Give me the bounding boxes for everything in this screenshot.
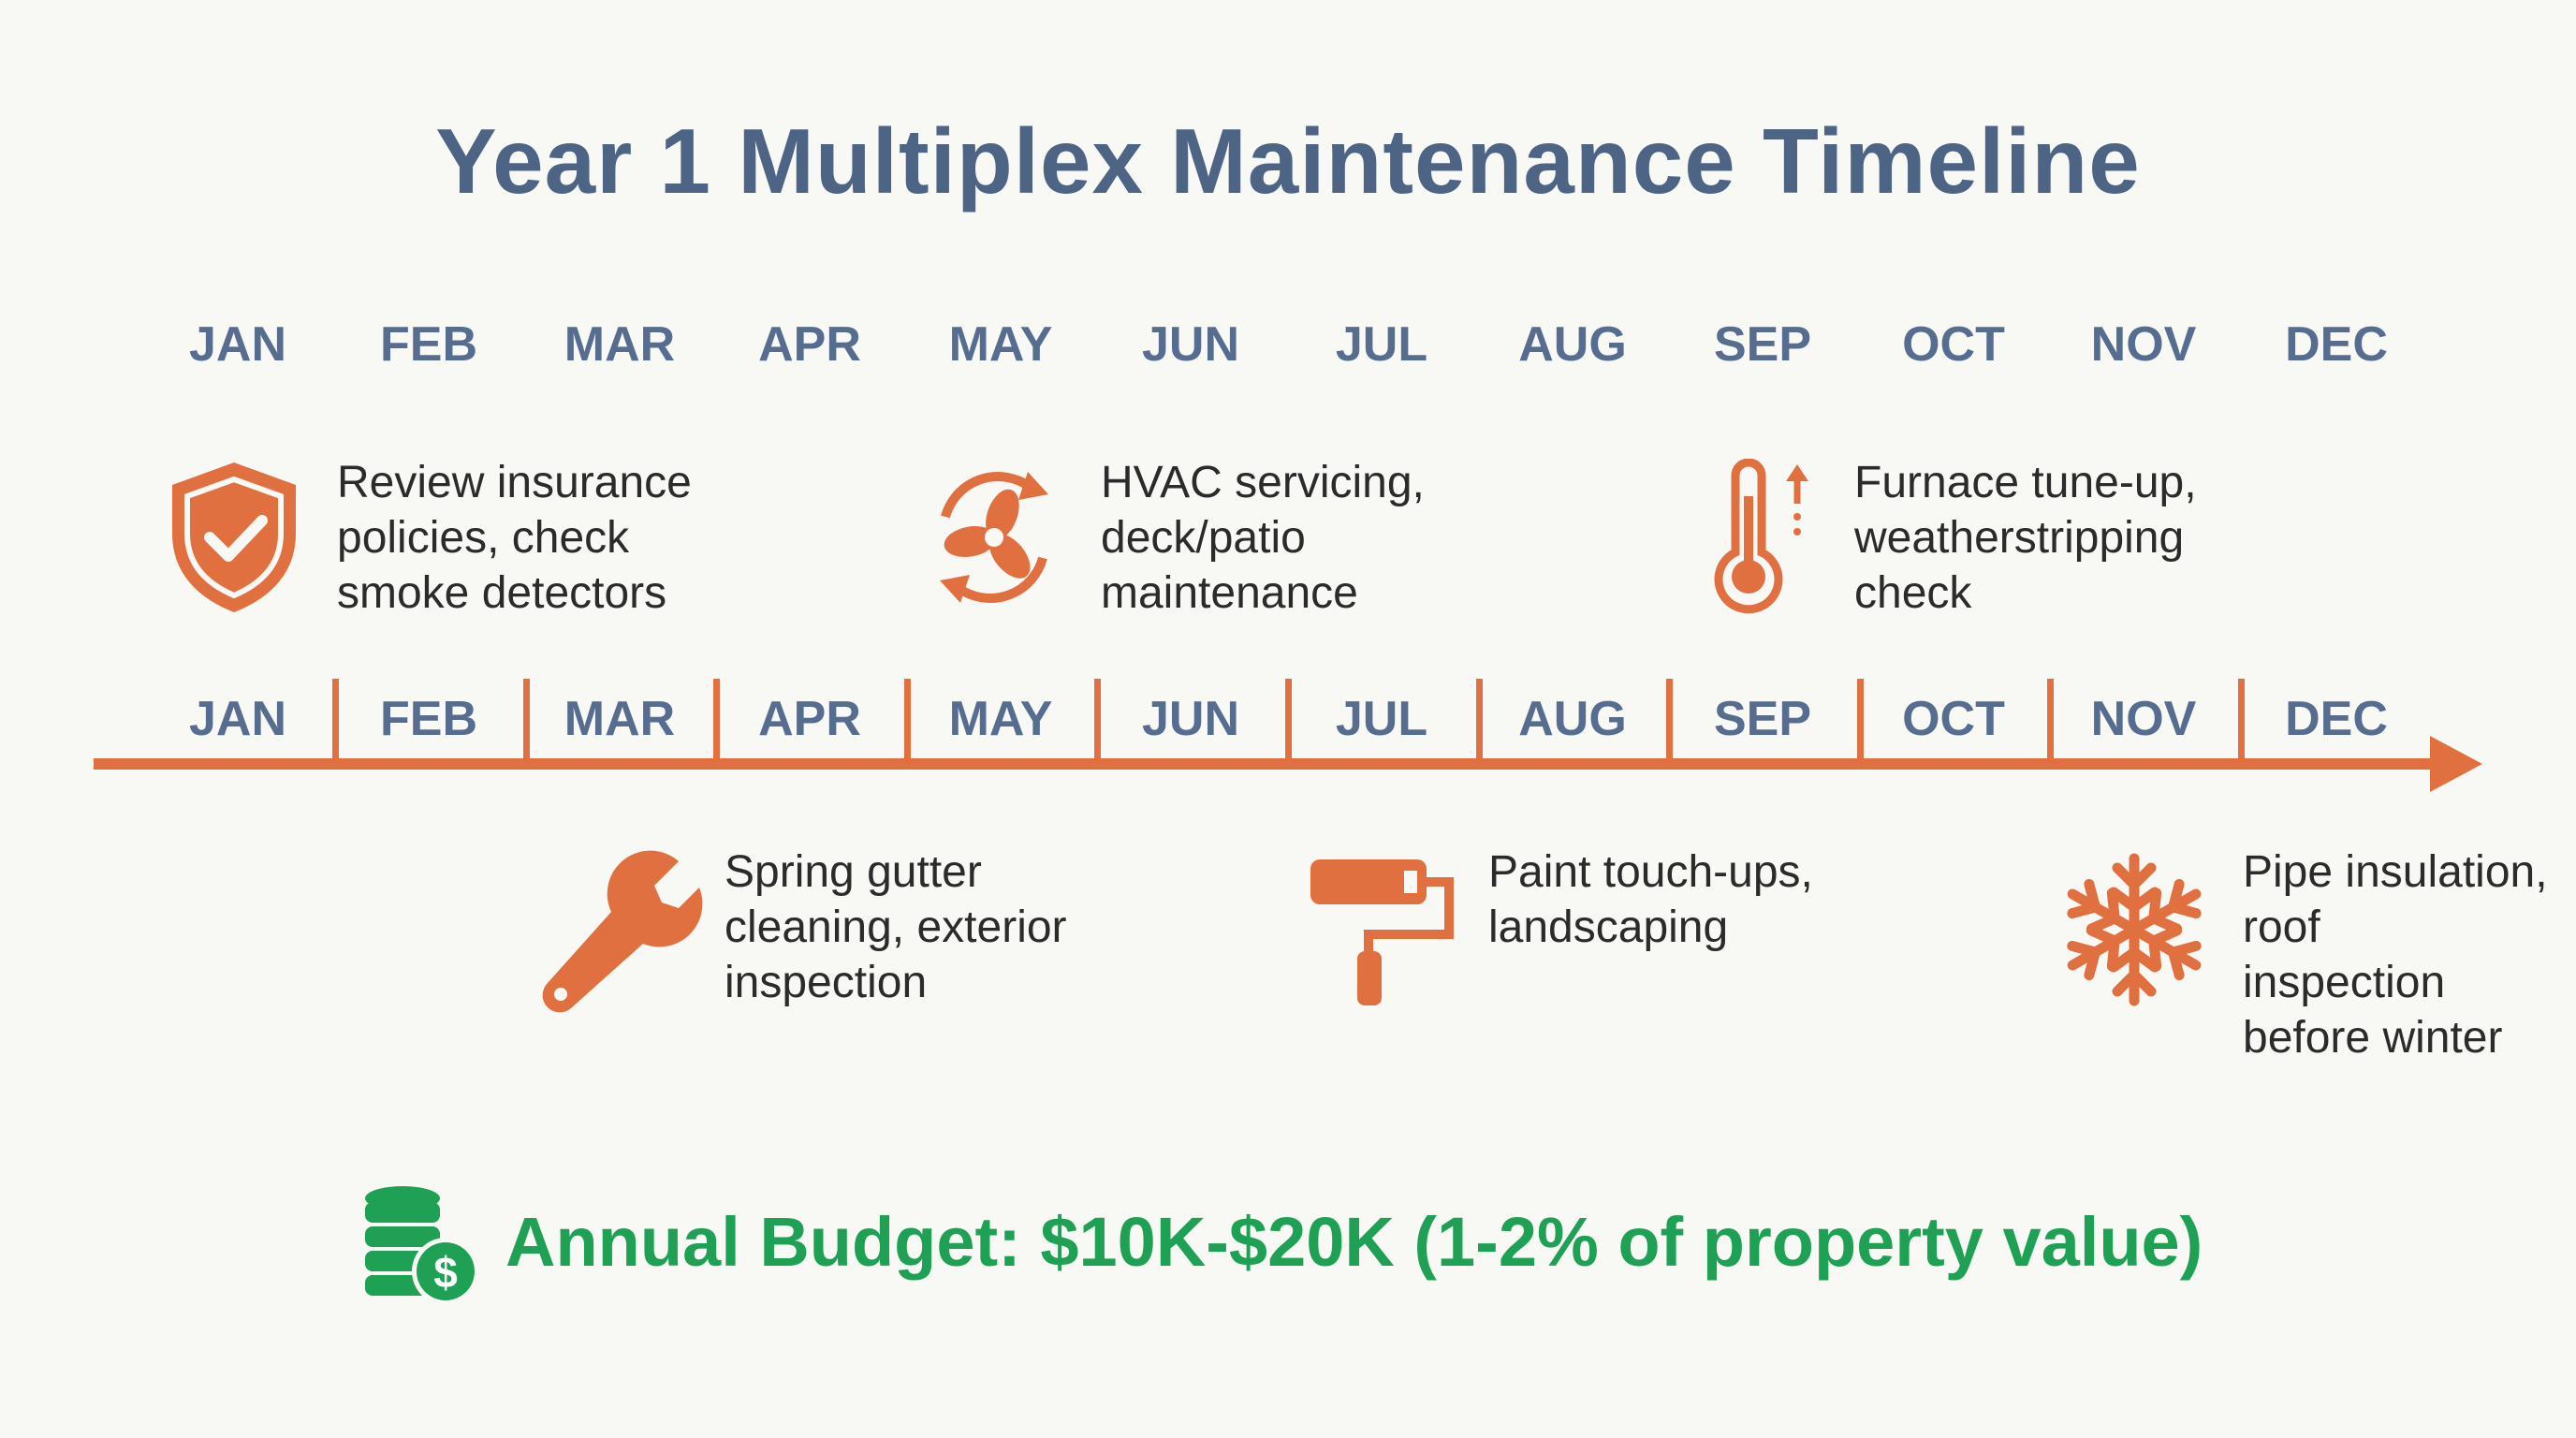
- text: insurance: [337, 458, 692, 618]
- text: insurance: smoke detectors: [337, 568, 666, 618]
- icon: coins: $: [433, 1248, 458, 1297]
- text: pipes: [2243, 847, 2548, 1063]
- text: gutters: inspection: [724, 958, 927, 1007]
- text: pipes: roof: [2243, 902, 2320, 952]
- text: HVAC: HVAC servicing,: [1101, 458, 1425, 507]
- top month row: [189, 317, 2388, 372]
- icon: coins: [365, 1186, 475, 1300]
- timeline axis with arrow: MAY: [949, 692, 1052, 746]
- top month row: APR: [758, 317, 861, 372]
- text: HVAC: maintenance: [1101, 568, 1358, 618]
- icon: wrench: [543, 850, 702, 1013]
- text: furnace: Furnace tune-up,: [1854, 458, 2197, 507]
- top month row: OCT: [1902, 317, 2005, 372]
- timeline axis with arrow: JAN: [189, 692, 286, 746]
- top month row: AUG: [1518, 317, 1627, 372]
- timeline axis with arrow: JUL: [1336, 692, 1427, 746]
- text: gutters: Spring gutter: [724, 847, 982, 897]
- top month row: FEB: [380, 317, 477, 372]
- top month row: MAY: [949, 317, 1052, 372]
- text: paint: [1488, 847, 1813, 952]
- text: HVAC: deck/patio: [1101, 513, 1306, 563]
- timeline axis with arrow: DEC: [2285, 692, 2388, 746]
- text: furnace: [1854, 458, 2197, 618]
- top month row: NOV: [2091, 317, 2196, 372]
- text: furnace: weatherstripping: [1854, 513, 2184, 563]
- timeline axis with arrow: [94, 679, 2482, 792]
- text: pipes: before winter: [2243, 1013, 2502, 1063]
- top month row: JAN: [189, 317, 286, 372]
- text: gutters: cleaning, exterior: [724, 902, 1067, 952]
- top month row: DEC: [2285, 317, 2388, 372]
- timeline axis with arrow: FEB: [380, 692, 477, 746]
- text: HVAC: [1101, 458, 1425, 618]
- top month row: JUN: [1142, 317, 1239, 372]
- icon: shield: [172, 462, 296, 612]
- icon: paint roller: [1310, 859, 1454, 1005]
- timeline axis with arrow: JUN: [1142, 692, 1239, 746]
- top month row: MAR: [564, 317, 675, 372]
- title: Year 1 Multiplex Maintenance Timeline: [435, 110, 2141, 213]
- text: gutters: [724, 847, 1067, 1007]
- top month row: JUL: [1336, 317, 1427, 372]
- text: paint: landscaping: [1488, 902, 1728, 952]
- text: furnace: check: [1854, 568, 1971, 618]
- timeline axis with arrow: AUG: [1518, 692, 1627, 746]
- text: pipes: Pipe insulation,: [2243, 847, 2548, 897]
- top month row: SEP: [1714, 317, 1811, 372]
- icon: HVAC fan: [940, 472, 1048, 603]
- text: insurance: policies, check: [337, 513, 629, 563]
- icon: snowflake: [2067, 854, 2202, 1005]
- budget text: Annual Budget: $10K-$20K (1-2% of property value): [505, 1203, 2203, 1281]
- budget line: [365, 1186, 2203, 1300]
- timeline axis with arrow: APR: [758, 692, 861, 746]
- timeline axis with arrow: SEP: [1714, 692, 1811, 746]
- text: paint: Paint touch-ups,: [1488, 847, 1813, 897]
- timeline axis with arrow: OCT: [1902, 692, 2005, 746]
- text: insurance: Review insurance: [337, 458, 692, 507]
- timeline axis with arrow: NOV: [2091, 692, 2196, 746]
- timeline axis with arrow: MAR: [564, 692, 675, 746]
- icon: thermometer: [1715, 459, 1808, 614]
- text: pipes: inspection: [2243, 958, 2445, 1007]
